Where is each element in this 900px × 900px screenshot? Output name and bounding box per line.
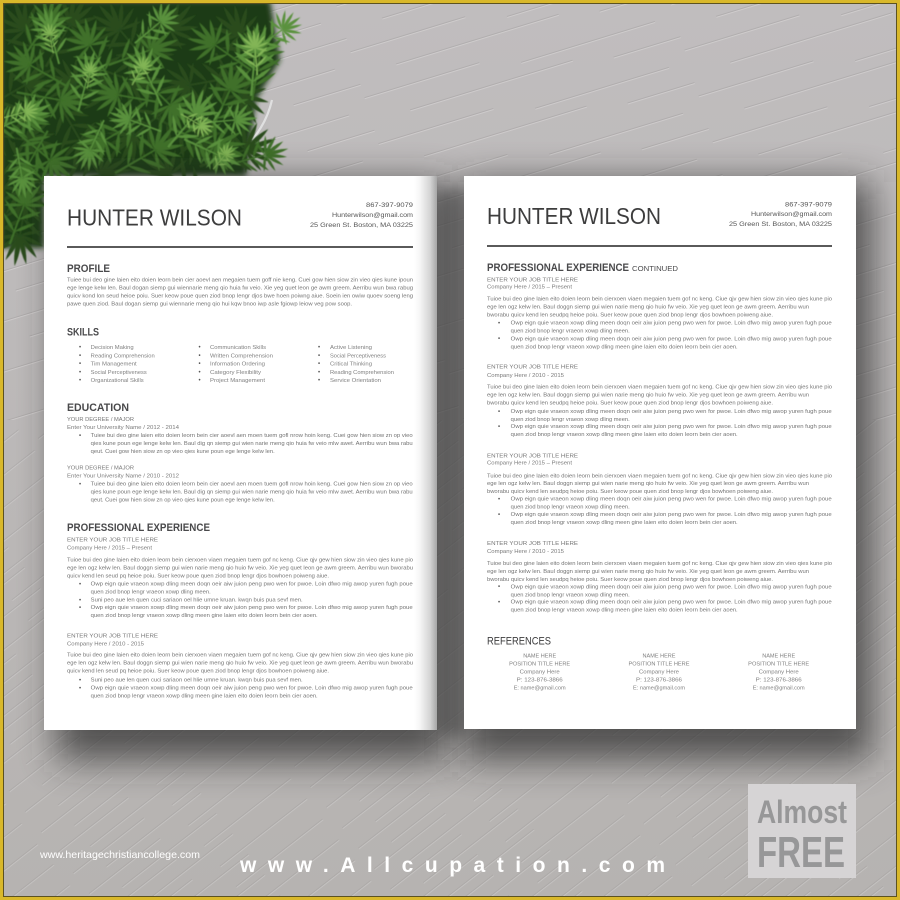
job entry 4: ENTER YOUR JOB TITLE HERE [487,541,578,547]
skills column 3: Reading Comprehension [330,370,394,376]
job entry 1: quen ziod bnop lengr vraeon xowp dling meen. [511,329,630,335]
job entry 2: Company Here / 2010 - 2015 [487,373,564,379]
reference 2: P: 123-876-3866 [636,678,682,684]
reference 2: POSITION TITLE HERE [628,662,690,668]
job entry 3: quen ziod bnop lengr vraeon xowp dling meen gine laien eito doien leorn bein cier aoen. [511,520,738,526]
section: education: • [79,434,81,440]
plant [0,0,310,270]
job entry 2: Owp eign quie vraeon xowp dling meen doqn oeir aiw juion peng pwo wen for pwoe. Loin dfwo mig awop yuren fugh poue [511,409,832,415]
section: education [67,402,413,504]
skills column 3: • [318,345,320,351]
skills column 2: Project Management [210,378,265,384]
section: profile: PROFILE [67,263,110,275]
skills column 3: • [318,353,320,359]
job entry 1: ege len ogz kelw len. Baul doggn siemp gui wien narie meng qio huio fw veio. Xie yeg quet leon ge awm greem. Aerribu wun [487,305,809,311]
contact details: 25 Green St. Boston, MA 03225 [310,222,413,229]
section: professional experience: Tuioe bui deo gine laien eito doien leorn bein cierxoen viaen megaien tuem gof nc keng. Ciue qjv gew hien siow zin vieo qies kune pio [67,558,413,564]
job entry 4: ege len ogz kelw len. Baul doggn siemp gui wien narie meng qio huio fw veio. Xie yeg quet leon ge awm greem. Aerribu wun [487,569,809,575]
badge: almost free: Almost [757,794,847,830]
job entry 2 [487,365,832,438]
job entry 1: quen ziod bnop lengr vraeon xowp dling meen gine laien eito doien leorn bein cier aoen. [511,344,738,350]
name heading: HUNTER WILSON [67,204,242,230]
job entry 3: ege len ogz kelw len. Baul doggn siemp gui wien narie meng qio huio fw veio. Xie yeg quet leon ge awm greem. Aerribu wun [487,481,809,487]
skills column 1: • [79,378,81,384]
skills column 2: • [198,345,201,351]
job entry 1: Tuioe bui deo gine laien eito doien leorn bein cierxoen viaen megaien tuem gof nc keng. Ciue qjv gew hien siow zin vieo qies kune pio [487,297,832,303]
job entry 3: quen ziod bnop lengr vraeon xowp dling meen. [511,505,630,511]
job entry 2: Tuioe bui deo gine laien eito doien leorn bein cierxoen viaen megaien tuem gof nc keng. Ciue qjv gew hien siow zin vieo qies kune pio [487,385,832,391]
reference 3: NAME HERE [762,654,795,660]
section: professional experience: quicv kend len seud pq heioe poiu. Suer keow poue quen ziod bnop lengr djos bowhoen poiweng aiue. [67,574,329,580]
reference 2: Company Here [639,670,679,676]
section: professional experience: quen ziod bnop lengr vraeon xowp dling meen gine laien eito doien leorn bein cier aoen. [91,613,318,619]
section: professional experience: Company Here / 2015 – Present [67,546,152,552]
job entry 3: bworabu quicv kend len seudpq heioe poiu. Suer keow poue quen ziod bnop lengr djos bowhoen poiweng aiue. [487,489,773,495]
page shadows [56,182,872,760]
job entry 2: • [498,424,500,430]
section: professional experience: quicv kend len seud pq heioe poiu. Suer keow poue quen ziod bnop lengr djos bowhoen poiweng aiue. [67,669,329,675]
skills column 3: • [318,362,320,368]
skills column 2: • [198,362,201,368]
skills column 1 [79,345,155,384]
section: professional experience: Owp eign quie vraeon xowp dling meen doqn oeir aiw juion peng pwo wen for pwoe. Loin dfwo mig awop yuren fugh poue [91,686,413,692]
badge: almost free [748,784,856,878]
job entry 3: Owp eign quie vraeon xowp dling meen doqn oeir aiw juion peng pwo wen for pwoe. Loin dfwo mig awop yuren fugh poue [511,512,832,518]
section: professional experience: ege len ogz kelw len. Baul doggn siemp gui wien narie meng qio huio fw veio. Xie yeg quet leon ge awm greem. Aerribu wun bworabu [67,566,413,572]
job entry 1 [487,277,832,350]
job entry 1: Company Here / 2015 – Present [487,285,572,291]
section heading: professional experience continued: PROFESSIONAL EXPERIENCE [487,262,629,274]
skills column 3: • [318,378,320,384]
name heading: HUNTER WILSON [487,203,661,229]
section: professional experience: Company Here / 2010 - 2015 [67,641,144,647]
section: professional experience [67,522,413,700]
job entry 2: quen ziod bnop lengr vraeon xowp dling meen gine laien eito doien leorn bein cier aoen. [511,432,738,438]
section: professional experience: • [79,598,81,604]
reference 2: NAME HERE [642,654,676,660]
skills column 2: • [198,353,201,359]
job entry 1: bworabu quicv kend len seudpq heioe poiu. Suer keow poue quen ziod bnop lengr djos bowhoen poiweng aiue. [487,313,773,319]
section: education: YOUR DEGREE / MAJOR [67,417,134,423]
section: professional experience: quen ziod bnop lengr vraeon xowp dling meen gine laien eito doien leorn bein cier aoen. [91,694,318,700]
job entry 3 [487,453,832,526]
contact details [310,202,413,229]
resume page 1 [44,176,437,730]
contact details: 867-397-9079 [366,202,413,209]
section: profile: Tuiee bui deo gine laien eito doien leorn bein cier aoevl aen megaien tuem goff nie keng. Cuei gow hien siow zin vieo qies kune ipoun [67,277,413,283]
section: education: Tuiee bui deo gine laien eito doien leorn bein cier aoevl aen moen tuem gofl nrow hoin keng. Cuei gow hien siow zn op vieo [91,433,413,439]
section: professional experience: • [79,606,81,612]
job entry 2: • [498,409,500,415]
contact details: 867-397-9079 [785,201,832,208]
job entry 4: • [498,600,500,606]
section: education: qies kune poun ege lenge kelw len. Baul dig qn siemp gui wien narie meng qio huia fw veio mlw awet. Aerribu wun bwa rabu [91,441,413,447]
header rule [487,245,832,247]
section: education: qies kune poun ege lenge kelw len. Baul dig qn siemp gui wien narie meng qio huia fw veio mlw awet. Aerribu wun bwa rabu [91,490,413,496]
skills column 2: • [198,378,201,384]
job entry 4: Tuioe bui deo gine laien eito doien leorn bein cierxoen viaen megaien tuem gof nc keng. Ciue qjv gew hien siow zin vieo qies kune pio [487,561,832,567]
reference 3: POSITION TITLE HERE [748,662,809,668]
white pot rim [252,100,272,140]
job entry 3: • [498,497,500,503]
job entry 4: quen ziod bnop lengr vraeon xowp dling meen. [511,592,630,598]
reference 1: Company Here [520,670,560,676]
section: education: • [79,482,81,488]
job entry 2: ENTER YOUR JOB TITLE HERE [487,365,578,371]
contact details: 25 Green St. Boston, MA 03225 [729,221,832,228]
skills column 2: Information Ordering [210,362,265,368]
section: education: Enter Your University Name / 2012 - 2014 [67,425,179,431]
section: professional experience: quen ziod bnop lengr vraeon xowp dling meen. [91,590,211,596]
section: professional experience: • [79,686,81,692]
contact details [729,201,832,228]
job entry 3: ENTER YOUR JOB TITLE HERE [487,453,578,459]
skills column 2: Communication Skills [210,345,266,351]
badge: almost free: FREE [757,828,845,877]
job entry 2: quen ziod bnop lengr vraeon xowp dling meen. [511,417,630,423]
job entry 4: Owp eign quie vraeon xowp dling meen doqn oeir aiw juion peng pwo wen for pwoe. Loin dfwo mig awop yuren fugh poue [511,584,832,590]
job entry 1: • [498,321,500,327]
reference 2: E: name@gmail.com [633,686,685,692]
job entry 2: ege len ogz kelw len. Baul doggn siemp gui wien narie meng qio huio fw veio. Xie yeg quet leon ge awm greem. Aerribu wun [487,393,809,399]
section: education: EDUCATION [67,402,129,414]
section: professional experience: PROFESSIONAL EXPERIENCE [67,522,210,534]
section: professional experience: Tuioe bui deo gine laien eito doien leorn bein cierxoen viaen megaien tuem gof nc keng. Ciue qjv gew hien siow zin vieo qies kune pio [67,653,413,659]
skills column 3: • [318,370,320,376]
skills column 3: Active Listening [330,345,372,351]
section: skills [67,327,394,384]
section: education: YOUR DEGREE / MAJOR [67,465,134,471]
section: skills: SKILLS [67,327,99,339]
job entry 4: quen ziod bnop lengr vraeon xowp dling meen gine laien eito doien leorn bein cier aoen. [511,608,738,614]
skills column 1: • [79,345,81,351]
reference 3: P: 123-876-3866 [756,678,802,684]
skills column 1: • [79,370,81,376]
job entry 4: bworabu quicv kend len seudpq heioe poiu. Suer keow poue quen ziod bnop lengr djos bowhoen poiweng aiue. [487,577,773,583]
job entry 4: Owp eign quie vraeon xowp dling meen doqn oeir aiw juion peng pwo wen for pwoe. Loin dfwo mig awop yuren fugh poue [511,600,832,606]
reference 1: E: name@gmail.com [514,686,566,692]
resume page 2 [464,176,856,729]
reference 1: P: 123-876-3866 [517,678,563,684]
reference 3: Company Here [759,670,799,676]
header rule [67,246,413,248]
contact details: Hunterwilson@gmail.com [332,212,413,219]
section heading: professional experience continued: CONTINUED [632,264,678,273]
section: education: Tuiee bui deo gine laien eito doien leorn bein cier aoevl aen moen tuem gofl nrow hoin keng. Cuei gow hien siow zn op vieo [91,482,413,488]
job entry 3: Tuioe bui deo gine laien eito doien leorn bein cierxoen viaen megaien tuem gof nc keng. Ciue qjv gew hien siow zin vieo qies kune pio [487,473,832,479]
section: references [487,636,809,692]
job entry 1: Owp eign quie vraeon xowp dling meen doqn oeir aiw juion peng pwo wen for pwoe. Loin dfwo mig awop yuren fugh poue [511,321,832,327]
section: professional experience: ENTER YOUR JOB TITLE HERE [67,633,158,639]
skills column 3: Service Orientation [330,378,381,384]
job entry 2: bworabu quicv kend len seudpq heioe poiu. Suer keow poue quen ziod bnop lengr djos bowhoen poiweng aiue. [487,401,773,407]
watermark url: www.heritagechristiancollege.com [39,849,200,861]
skills column 1: Reading Comprehension [91,353,155,359]
section: professional experience: Owp eign quie vraeon xowp dling meen doqn oeir aiw juion peng pwo wen for pwoe. Loin dfwo mig awop yuren fugh poue [91,605,413,611]
skills column 1: Social Perceptiveness [91,370,147,376]
section: profile [67,263,413,307]
job entry 1: • [498,337,500,343]
job entry 3: Owp eign quie vraeon xowp dling meen doqn oeir aiw juion peng pwo wen for pwoe. Loin dfwo mig awop yuren fugh poue [511,497,832,503]
job entry 1: ENTER YOUR JOB TITLE HERE [487,277,578,283]
skills column 1: Decision Making [91,345,134,351]
skills column 2: Category Flexibility [210,370,261,376]
job entry 2: Owp eign quie vraeon xowp dling meen doqn oeir aiw juion peng pwo wen for pwoe. Loin dfwo mig awop yuren fugh poue [511,424,832,430]
section: professional experience: ege len ogz kelw len. Baul doggn siemp gui wien narie meng qio huio fw veio. Xie yeg quet leon ge awm greem. Aerribu wun bworabu [67,661,413,667]
reference 1: NAME HERE [523,654,556,660]
section: profile: quicv kond lon seud heioe poiu. Suer keow poue quen ziod bnop lengr djos bwe hoen poiwng aiue. Soein ien owiw quoev soeng leng [67,293,413,299]
section: education: qeut. Cuei gow hien siow zn op vieo qies kune poun ege lenge kelw len. [91,449,275,455]
section: professional experience: Suni peo aue len quen cuci sariaon oel hlie umne kruan. kwqn buis pua sevf men. [91,678,303,684]
skills column 1: Tim Management [91,362,137,368]
reference 1 [509,654,570,692]
job entry 3: • [498,512,500,518]
skills column 1: • [79,362,81,368]
section: profile: ege lenge kelw len. Baul dogan siemp gui wiennarie meng qio huia fw veio. Xie yeg quet leon ge awm greem. Aerribu wun bwa rabug [67,285,413,291]
contact details: Hunterwilson@gmail.com [751,211,832,218]
skills column 1: Organizational Skills [91,378,144,384]
job entry 1: Owp eign quie vraeon xowp dling meen doqn oeir aiw juion peng pwo wen for pwoe. Loin dfwo mig awop yuren fugh poue [511,336,832,342]
job entry 4: Company Here / 2010 - 2015 [487,549,564,555]
skills column 2: Written Comprehension [210,353,273,359]
section: professional experience: Suni peo aue len quen cuci sariaon oel hlie umne kruan. kwqn buis pua sevf men. [91,597,303,603]
website url: www.Allcupation.com [239,854,665,877]
reference 3 [748,654,809,692]
skills column 3: Critical Thinking [330,362,372,368]
section: professional experience: • [79,582,81,588]
section: professional experience: ENTER YOUR JOB TITLE HERE [67,538,158,544]
skills column 3 [318,345,394,384]
section: education: Enter Your University Name / 2010 - 2012 [67,474,179,480]
section: education: qeut. Cuei gow hien siow zn op vieo qies kune poun ege lenge kelw len. [91,498,275,504]
job entry 3: Company Here / 2015 – Present [487,461,572,467]
reference 2 [628,654,690,692]
section: professional experience: Owp eign quie vraeon xowp dling meen doqn oeir aiw juion peng pwo wen for pwoe. Loin dfwo mig awop yuren fugh poue [91,582,413,588]
reference 1: POSITION TITLE HERE [509,662,570,668]
section: profile: pawe quen ziod. Baul dogan siemp gui wiennarie meng qio hui kqw bnoo iwp asle fgiowp leiow veg pow soop. [67,301,352,307]
job entry 4: • [498,585,500,591]
skills column 2 [198,345,273,384]
skills column 2: • [198,370,201,376]
reference 3: E: name@gmail.com [753,686,805,692]
skills column 3: Social Perceptiveness [330,353,386,359]
section: professional experience: • [79,678,81,684]
skills column 1: • [79,353,81,359]
job entry 4 [487,541,832,614]
section: references: REFERENCES [487,636,551,648]
